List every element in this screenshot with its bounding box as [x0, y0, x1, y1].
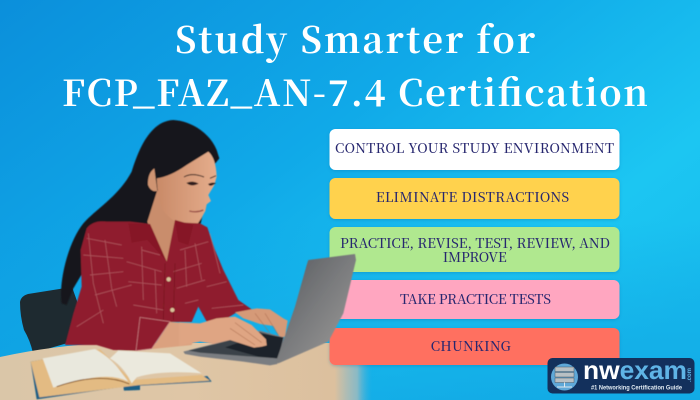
- chair: [20, 287, 82, 353]
- logo badge: [548, 358, 694, 394]
- face: [157, 152, 217, 226]
- red plaid shirt: [65, 220, 253, 351]
- table: [0, 343, 372, 400]
- card: practice, revise, test, review, and improve: PRACTICE, REVISE, TEST, REVIEW, AND: [340, 232, 610, 252]
- title: [62, 13, 648, 117]
- shirt and arms: [65, 220, 253, 351]
- logo tagline: #1 Networking Certification Guide: [591, 386, 683, 392]
- title line 1: Study Smarter for: [175, 13, 535, 64]
- card: eliminate distractions: ELIMINATE DISTRACTIONS: [376, 186, 569, 206]
- card: control your study environment: CONTROL YOUR STUDY ENVIRONMENT: [335, 137, 614, 157]
- laptop base: [183, 331, 284, 365]
- keyboard: [225, 334, 283, 358]
- card: take practice tests: [330, 280, 620, 319]
- book: [31, 349, 212, 399]
- logo .com: .com: [687, 368, 693, 382]
- student upper body: [61, 120, 219, 305]
- far hand: [235, 308, 288, 337]
- icon: server rack: [551, 364, 578, 390]
- title line 2: FCP_FAZ_AN-7.4 Certification: [62, 66, 648, 117]
- card: practice, revise, test, review, and improve: IMPROVE: [443, 246, 507, 266]
- card: eliminate distractions: [330, 178, 620, 219]
- book page block: [31, 349, 210, 397]
- near hand: [179, 317, 267, 348]
- laptop: [183, 254, 356, 365]
- laptop screen: [276, 254, 356, 363]
- ear: [148, 168, 157, 191]
- deck: [188, 332, 283, 358]
- finger lines: [230, 313, 278, 345]
- card: practice, revise, test, review, and improve: [330, 227, 620, 272]
- book cover: [31, 350, 212, 399]
- card: take practice tests: TAKE PRACTICE TESTS: [400, 288, 551, 308]
- card: chunking: CHUNKING: [431, 335, 511, 355]
- study tips list: [330, 129, 620, 365]
- card: control your study environment: [330, 129, 620, 170]
- right page: [110, 351, 202, 383]
- placket and buttons: [163, 263, 175, 320]
- facial features: [184, 175, 216, 212]
- page edge shadow: [57, 378, 129, 387]
- hands and laptop: [179, 254, 356, 365]
- nwexam logo: [548, 355, 694, 394]
- card: chunking: [330, 328, 620, 365]
- long hair: [61, 120, 219, 305]
- sleeve cuff: [136, 317, 170, 351]
- shirt plaid lines: [77, 233, 243, 327]
- neck: [147, 190, 178, 262]
- near forearm: [152, 322, 200, 349]
- left page: [43, 349, 128, 388]
- collar: [128, 220, 193, 262]
- illustration: student at laptop: [31, 120, 356, 399]
- logo wordmark: nwexam: [583, 355, 687, 385]
